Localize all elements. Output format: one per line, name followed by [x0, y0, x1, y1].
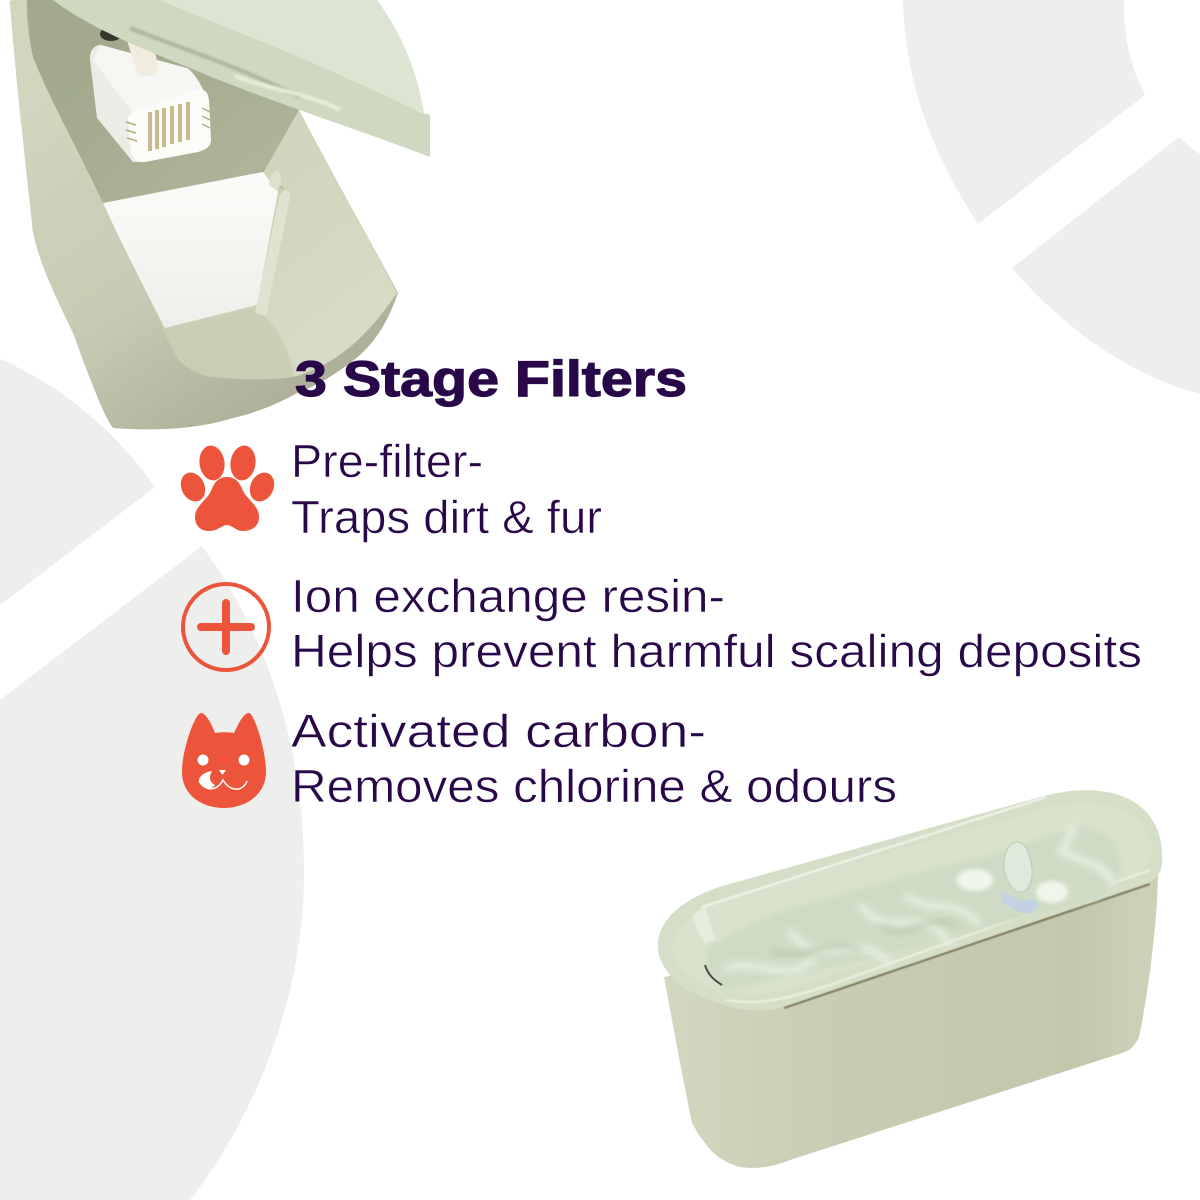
- interior floor: [163, 307, 294, 379]
- text: pre-filter line 2: Traps dirt & fur: [291, 491, 602, 543]
- fountain interior wall: [26, 0, 397, 379]
- filter ridge tip: [269, 171, 281, 190]
- background shape: left upper arc: [0, 359, 155, 605]
- photo: open fountain with pump and filter: [10, 0, 430, 429]
- lid underside rim: [53, 0, 430, 157]
- raised lid surface: [160, 0, 424, 113]
- pump side: [90, 45, 143, 162]
- icon: paw: [176, 444, 279, 531]
- water ripple shadows: [770, 921, 955, 954]
- body shadow line: [784, 884, 1150, 1008]
- blue reflection: [1000, 892, 1038, 913]
- pump side vents: [126, 108, 210, 141]
- interior rear shade: [27, 0, 299, 203]
- fountain body: [664, 875, 1158, 1168]
- drain hole: [705, 965, 722, 985]
- background shape: top-right lower arc: [1012, 137, 1200, 394]
- background shape: left lower arc: [0, 546, 304, 1200]
- water glints left: [957, 869, 993, 891]
- text: ion exchange line 2: Helps prevent harmful scaling deposits: [291, 625, 1142, 677]
- icon: plus in circle: [183, 584, 269, 670]
- fountain base outer shell: [10, 0, 398, 429]
- lid rim: [658, 790, 1162, 1010]
- lid underside reflections: [130, 28, 300, 97]
- water spout: [1004, 842, 1032, 892]
- text: pre-filter line 1: Pre-filter-: [291, 435, 483, 487]
- text: ion exchange line 1: Ion exchange resin-: [291, 570, 725, 622]
- pump top: [93, 45, 208, 113]
- pump unit: [90, 27, 211, 162]
- title: 3 Stage Filters: [295, 351, 687, 407]
- photo: assembled fountain with water: [658, 790, 1162, 1168]
- pump intake grille: [148, 102, 190, 151]
- lid underside glint: [235, 76, 340, 110]
- water surface: [707, 827, 1121, 990]
- top rim highlight: [702, 797, 1046, 907]
- left gloss patch: [692, 907, 716, 944]
- water glints right: [1036, 881, 1068, 903]
- text: activated carbon line 1: Activated carbon-: [291, 705, 706, 757]
- lid inner basin: [672, 802, 1152, 995]
- pump spout: [126, 37, 158, 76]
- pump front: [128, 89, 211, 162]
- pump hose: [100, 27, 122, 41]
- background shape: top-right upper arc: [903, 0, 1145, 224]
- water ripples: [725, 825, 1115, 970]
- icon: cat face: [182, 713, 266, 808]
- front rim highlight: [726, 870, 1150, 1002]
- filter divider ridge: [255, 190, 290, 316]
- white felt pre-filter: [103, 172, 278, 328]
- text: activated carbon line 2: Removes chlorine & odours: [291, 760, 897, 812]
- interior right wall: [262, 110, 397, 376]
